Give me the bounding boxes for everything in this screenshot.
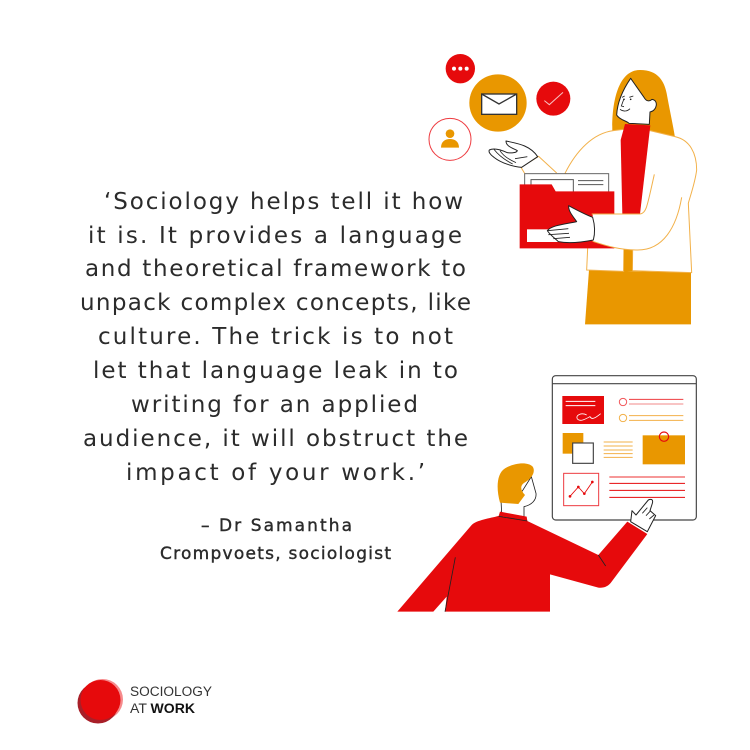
red card	[562, 396, 604, 424]
face details	[620, 96, 633, 111]
raised hand finger lines	[494, 149, 527, 164]
hair	[498, 463, 534, 504]
logo mark	[78, 679, 123, 724]
quote text: writing for an applied	[131, 392, 418, 418]
folder	[520, 184, 614, 248]
quote text	[80, 189, 471, 486]
quote text: unpack complex concepts, like	[80, 290, 471, 316]
skirt	[585, 270, 691, 324]
logo: Sociology at Work	[78, 679, 212, 724]
icon: red speech dots	[446, 54, 475, 83]
torso and arm	[397, 516, 647, 612]
red lines	[609, 474, 685, 479]
collar	[499, 512, 527, 521]
board window	[552, 376, 696, 520]
attribution: – Dr Samantha	[201, 516, 352, 536]
face	[617, 78, 656, 124]
attribution	[160, 516, 391, 564]
raised sleeve	[522, 156, 557, 182]
quote text: it is. It provides a language	[88, 223, 462, 249]
quote text: and theoretical framework to	[85, 256, 466, 282]
orange lines	[604, 442, 633, 457]
sleeve lines	[592, 174, 682, 250]
hair	[612, 70, 675, 140]
icon: envelope on orange circle	[469, 74, 527, 132]
sleeve outline	[521, 156, 557, 173]
attribution: Crompvoets, sociologist	[160, 544, 391, 564]
icon: person in outlined circle	[429, 118, 471, 160]
document in folder	[525, 174, 609, 194]
illustration: man pointing at board	[397, 376, 696, 612]
pointing hand finger lines	[642, 508, 654, 519]
line chart	[564, 473, 599, 506]
illustration: woman with folder and message icons	[429, 54, 697, 324]
orange card with pin	[643, 432, 685, 464]
finger lines	[547, 229, 570, 239]
folder label	[527, 229, 559, 242]
quote text: audience, it will obstruct the	[83, 426, 468, 452]
quote text: culture. The trick is to not	[98, 324, 453, 350]
list rows	[619, 398, 683, 422]
jacket	[565, 129, 697, 273]
garment lines	[445, 516, 606, 612]
squares	[563, 433, 593, 463]
pointing hand	[631, 499, 656, 532]
holding hand	[547, 206, 594, 243]
skirt strip	[624, 248, 632, 271]
logo: Sociology at Work: AT WORK	[130, 701, 195, 716]
neck	[501, 477, 536, 517]
logo wordmark: SOCIOLOGY	[130, 684, 212, 699]
jacket arm	[593, 174, 682, 250]
quote text: ‘Sociology helps tell it how	[104, 189, 463, 215]
icon: red check circle	[536, 82, 570, 116]
raised hand	[489, 141, 538, 167]
quote text: impact of your work.’	[126, 460, 425, 486]
quote text: let that language leak in to	[93, 358, 458, 384]
shirt	[621, 124, 650, 214]
